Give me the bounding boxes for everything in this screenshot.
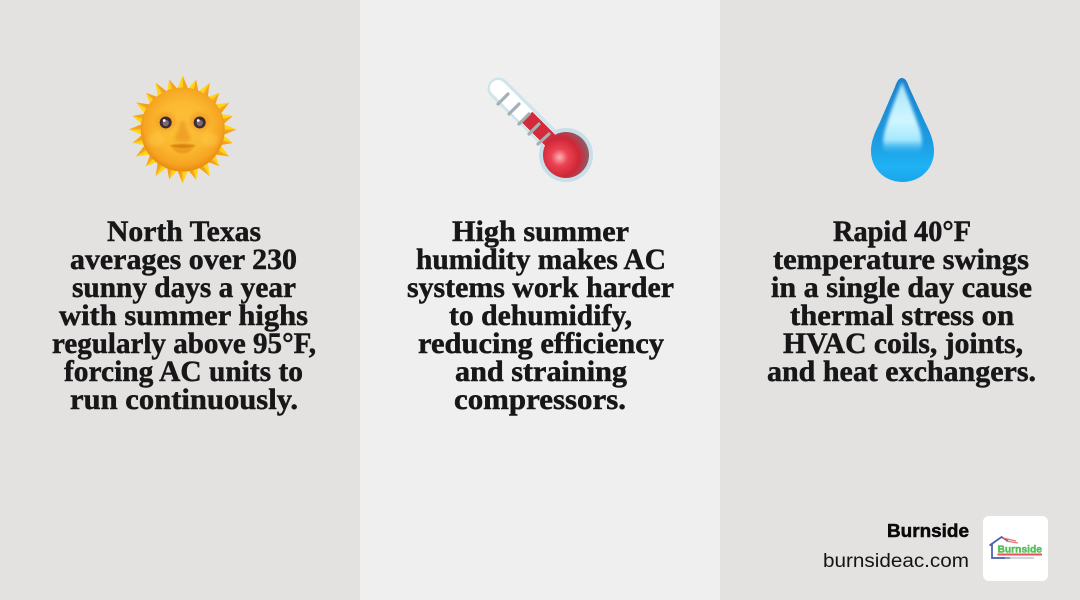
text block: humidity: humidity makes AC (416, 243, 666, 276)
text block: sunny days: North Texas (107, 215, 261, 248)
text block: temperature swings: and heat exchangers. (767, 355, 1036, 388)
logo: Burnside (998, 544, 1042, 556)
text block: temperature swings: thermal stress on (790, 299, 1014, 332)
text block: humidity: and straining (455, 355, 627, 388)
text block: temperature swings: in a single day cause (771, 271, 1032, 304)
text block: temperature swings (767, 215, 1036, 388)
text block: sunny days (52, 215, 316, 416)
text block: humidity: compressors. (454, 383, 626, 416)
text block: sunny days: run continuously. (70, 383, 298, 416)
text block: sunny days: with summer highs (59, 299, 308, 332)
text block: sunny days: sunny days a year (72, 271, 296, 304)
text block: humidity: systems work harder (407, 271, 674, 304)
text block: humidity: High summer (452, 215, 629, 248)
icon: sun with face (129, 76, 237, 184)
icon: thermometer (498, 88, 593, 182)
panel: humidity (360, 0, 720, 600)
text block: sunny days: forcing AC units to (64, 355, 303, 388)
text block: temperature swings: HVAC coils, joints, (783, 327, 1023, 360)
text block: humidity: to dehumidify, (449, 299, 632, 332)
logo (983, 516, 1048, 581)
brand name: Burnside (887, 520, 969, 541)
text block: temperature swings: temperature swings (773, 243, 1029, 276)
text block: humidity: reducing efficiency (418, 327, 664, 360)
website: burnsideac.com (823, 551, 969, 572)
text block: temperature swings: Rapid 40°F (833, 215, 971, 248)
text block: sunny days: regularly above 95°F, (52, 327, 316, 360)
panel: sunny days (0, 0, 360, 600)
text block: sunny days: averages over 230 (70, 243, 297, 276)
text block: humidity (407, 215, 674, 416)
panel: temperature swings (720, 0, 1080, 600)
icon: water drop (871, 78, 934, 182)
